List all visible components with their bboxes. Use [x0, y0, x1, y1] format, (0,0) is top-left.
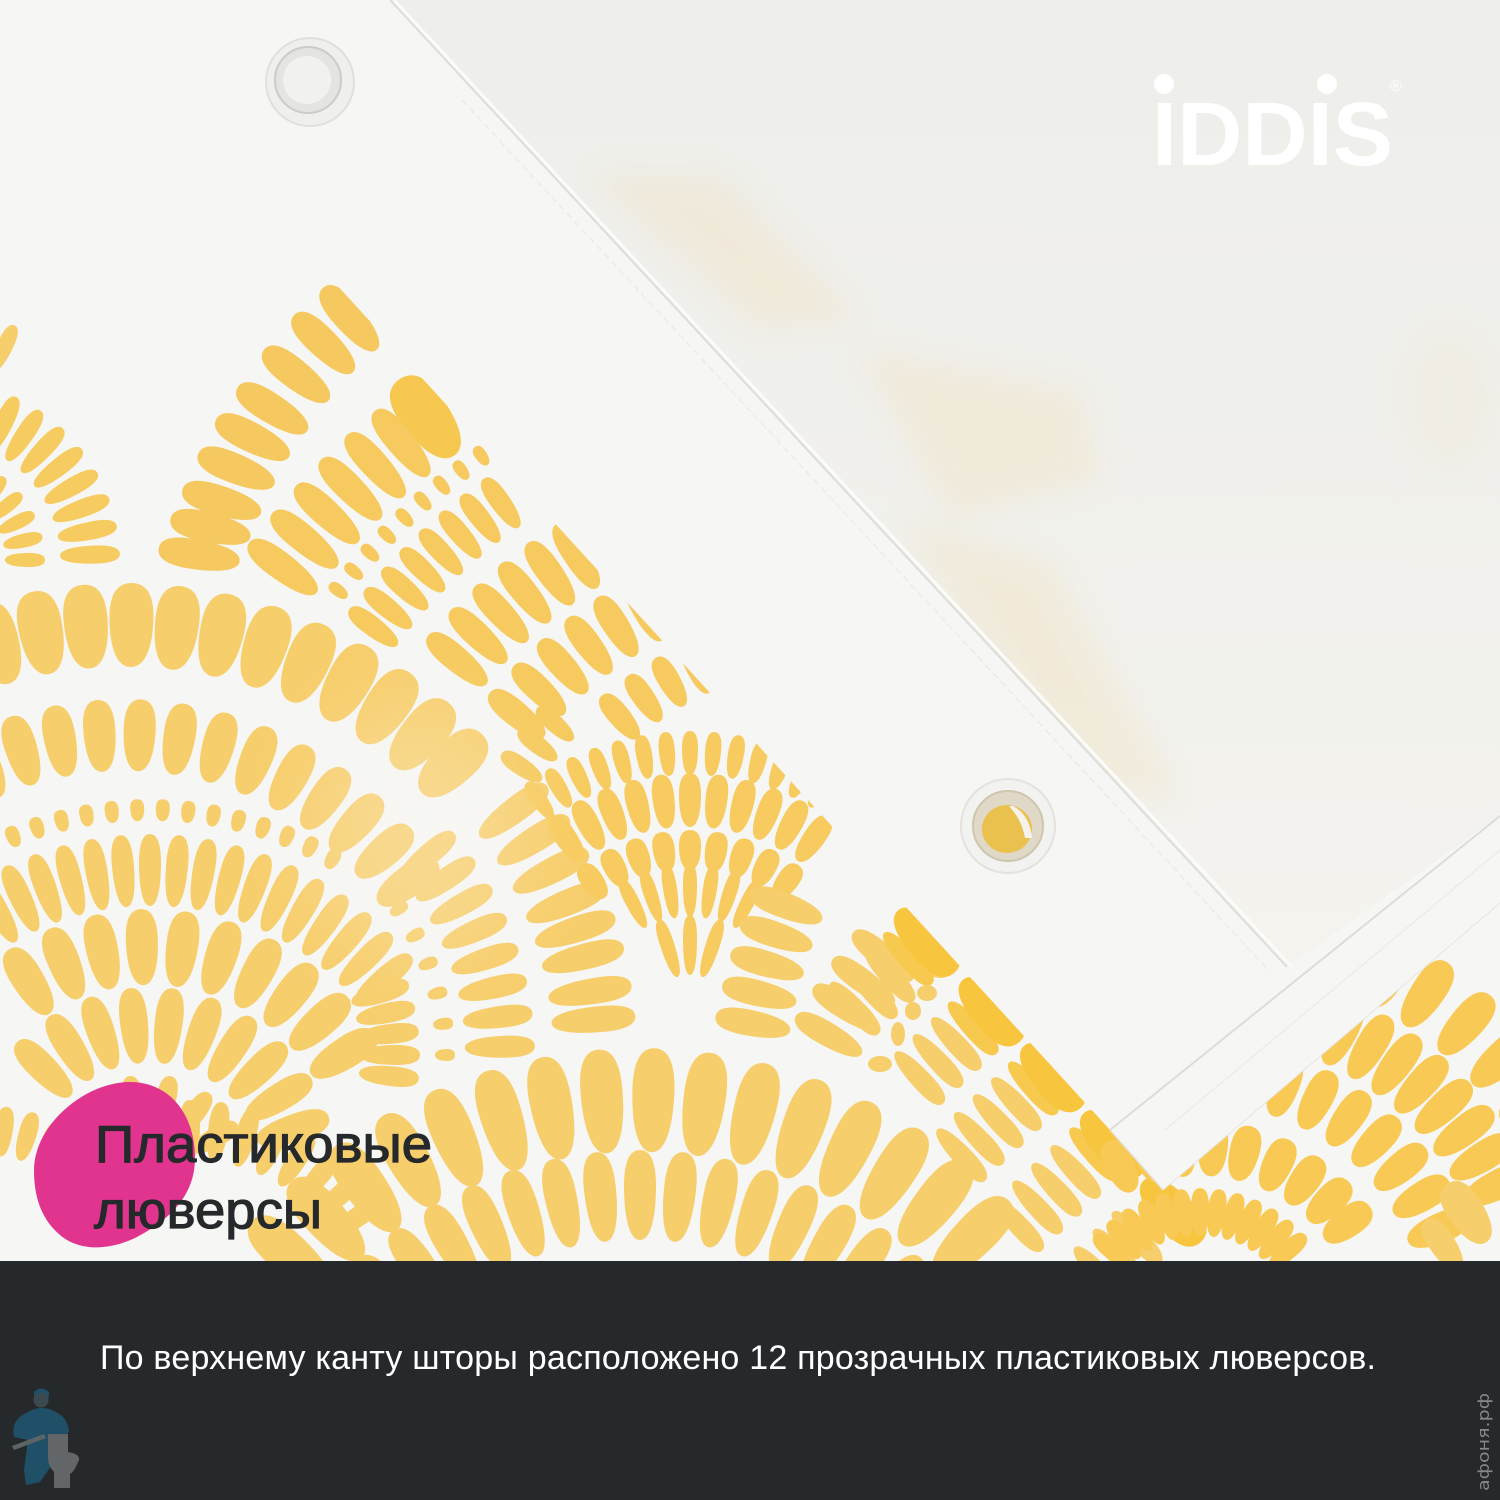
- pattern: small central fan: [521, 731, 859, 979]
- faint show-through smudges: [590, 175, 1495, 800]
- pattern: small fan at left edge: [0, 1106, 52, 1161]
- grommet: bottom: [961, 779, 1055, 873]
- logo: ®: [1390, 78, 1402, 95]
- grommet: top: [266, 38, 354, 126]
- pattern: top left fan: [0, 393, 120, 567]
- pattern: second long petals: [794, 929, 914, 1057]
- icon: plumber with toilet: [12, 1388, 79, 1488]
- logo: IDDIS: [1152, 85, 1393, 185]
- dark caption band: [0, 1261, 1500, 1500]
- pattern: bottom centre fan: [248, 1048, 1013, 1261]
- pink blob: [34, 1082, 195, 1247]
- pattern: big left fan outer rows: [0, 583, 498, 916]
- pattern: long pale fan: [349, 776, 636, 1089]
- pattern: long petals right of central fan: [715, 886, 822, 1038]
- caption text: По верхнему канту шторы расположено 12 прозрачных пластиковых люверсов.: [100, 1339, 1376, 1377]
- pattern: diagonal rows along hem: [247, 375, 710, 782]
- pattern: small fan under heading: [182, 1100, 369, 1228]
- pattern: tiny petals: [868, 974, 947, 1072]
- faded area of the pattern: [310, 700, 530, 960]
- pattern: lower right fan: [1088, 913, 1500, 1274]
- heading: люверсы: [94, 1182, 322, 1240]
- heading: [94, 1116, 432, 1240]
- yellow petal pattern: [0, 278, 1500, 1361]
- back curtain panel: [390, 0, 1500, 967]
- pattern: far right petals: [1422, 1181, 1492, 1261]
- front hem band: [76, 0, 1500, 1190]
- pattern: top left extra petal: [0, 324, 18, 368]
- heading: Пластиковые: [95, 1116, 432, 1174]
- pattern: big left fan inner rows: [0, 799, 418, 1159]
- pattern: band parallel to hem: [830, 908, 1207, 1261]
- pattern: upper fan outer row: [156, 278, 388, 576]
- watermark: афоня.рф: [1474, 1393, 1493, 1491]
